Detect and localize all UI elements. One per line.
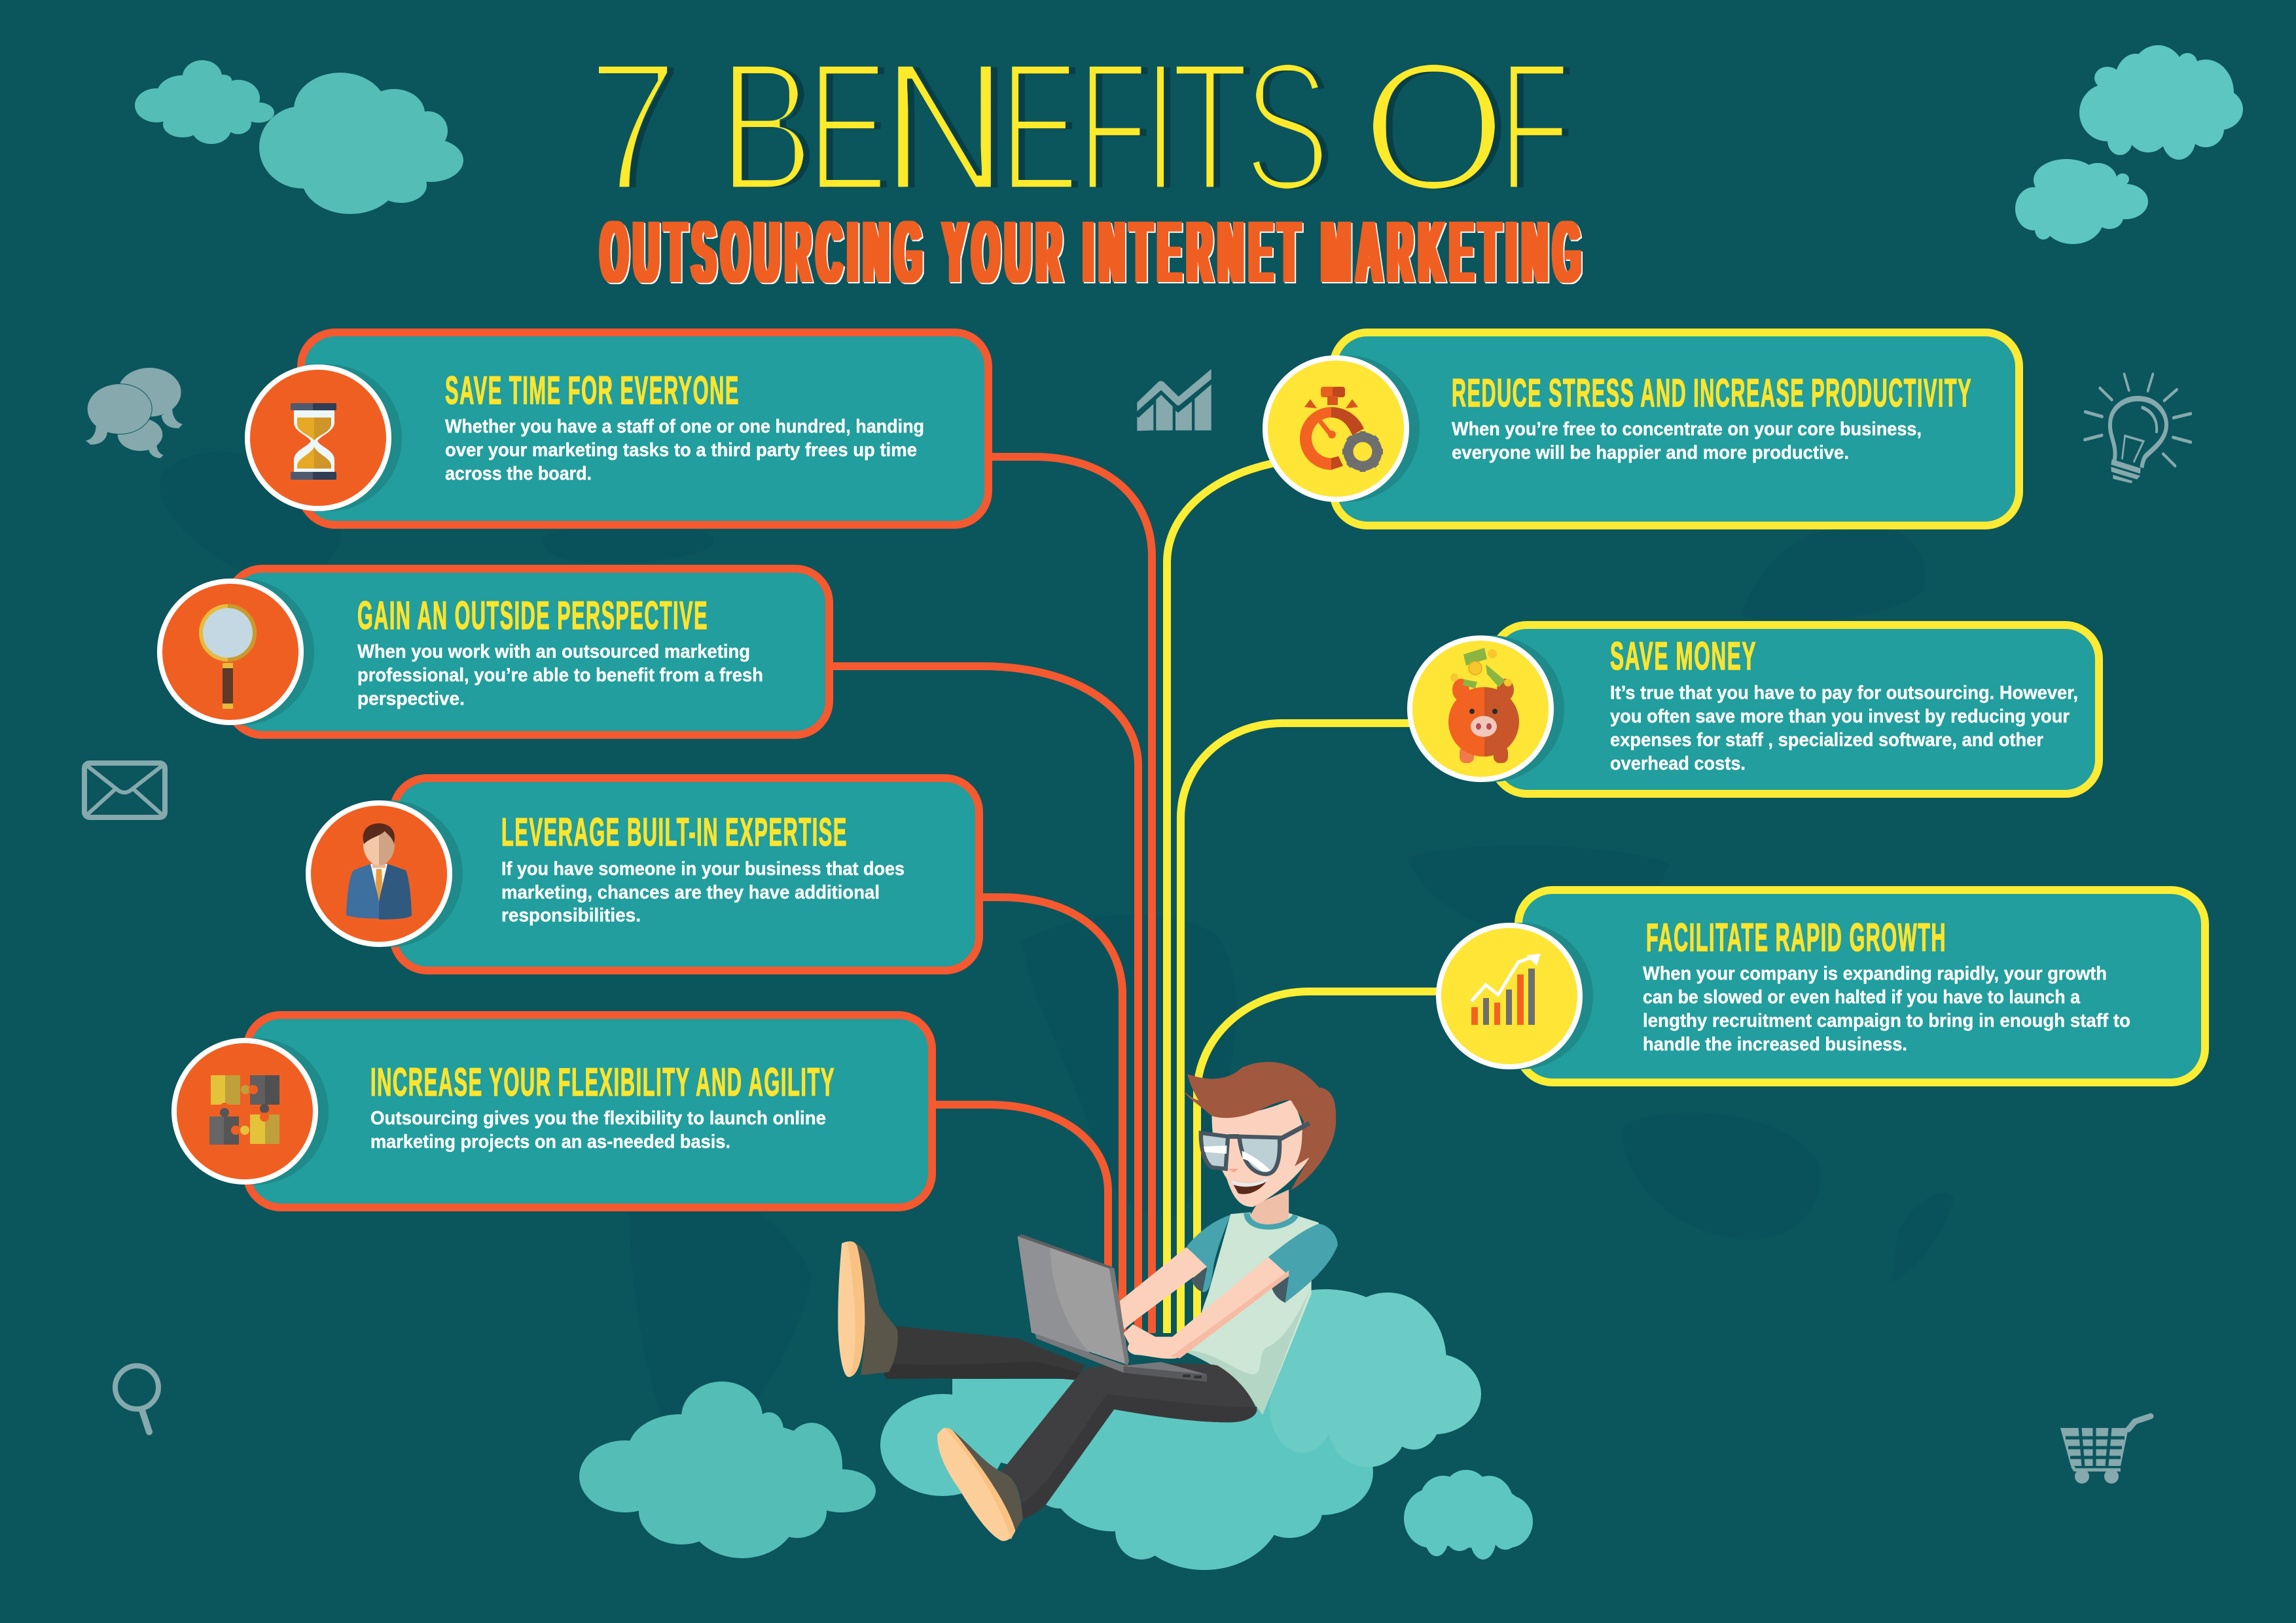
title: 7 benefits of: 7 xyxy=(588,23,677,230)
title: 7 benefits of: S xyxy=(1244,23,1330,230)
body text xyxy=(501,859,905,926)
title: 7 benefits of: O xyxy=(1362,23,1506,230)
body text xyxy=(1643,963,2130,1055)
laptop xyxy=(1018,1234,1207,1382)
icon: stopwatch and gear xyxy=(1265,355,1420,502)
body text: Outsourcing gives you the flexibility to launch online xyxy=(370,1108,826,1129)
icon: growth chart xyxy=(1439,923,1593,1069)
body text: When your company is expanding rapidly, your growth xyxy=(1643,963,2107,984)
title: 7 benefits of: T xyxy=(1172,23,1249,230)
body text: overhead costs. xyxy=(1610,753,1746,774)
cloud: top left small xyxy=(135,60,274,144)
heading: INCREASE YOUR FLEXIBILITY AND AGILITY xyxy=(370,1060,835,1104)
cloud: bottom left xyxy=(579,1382,876,1558)
heading: FACILITATE RAPID GROWTH xyxy=(1646,916,1946,959)
body text: Whether you have a staff of one or one hundred, handing xyxy=(445,416,924,437)
cloud: top left large xyxy=(259,73,463,214)
icon: shopping cart xyxy=(2060,1416,2151,1484)
body text: marketing projects on an as-needed basis. xyxy=(370,1132,730,1152)
icon: magnifying glass outline xyxy=(115,1366,158,1432)
title: 7 benefits of: E xyxy=(808,23,888,230)
body text: lengthy recruitment campaign to bring in enough staff to xyxy=(1643,1010,2130,1031)
icon: mail envelope xyxy=(84,763,165,817)
cloud: bottom right small xyxy=(1404,1470,1533,1560)
icon: hourglass xyxy=(247,365,402,511)
shirt xyxy=(1183,1212,1319,1415)
body text: you often save more than you invest by reducing your xyxy=(1610,706,2070,727)
body text: handle the increased business. xyxy=(1643,1034,1907,1055)
sleeves and arms xyxy=(1120,1215,1338,1330)
panel: reduce stress and increase productivity xyxy=(1265,332,2019,526)
panel: facilitate rapid growth xyxy=(1439,890,2205,1082)
front leg and shoe xyxy=(937,1364,1257,1541)
title: 7 benefits of: E xyxy=(1000,23,1079,230)
body text xyxy=(1452,419,1922,463)
panel: gain an outside perspective xyxy=(160,569,829,735)
body text: everyone will be happier and more productive. xyxy=(1452,442,1849,463)
front arm and hands xyxy=(1124,1257,1289,1359)
body text: When you work with an outsourced marketing xyxy=(357,641,750,662)
cloud: top right small xyxy=(2015,159,2148,244)
title: 7 benefits of: B xyxy=(719,23,813,230)
cloud: top right large xyxy=(2079,45,2243,160)
title: 7 benefits of: F xyxy=(1499,23,1570,230)
panel: leverage built-in expertise xyxy=(308,778,979,971)
title: 7 benefits of: I xyxy=(1144,23,1177,230)
icon: piggy bank with money xyxy=(1410,635,1564,782)
body text: marketing, chances are they have additional xyxy=(501,882,880,903)
icon: line and bar chart xyxy=(1137,369,1211,431)
icon: speech bubbles xyxy=(86,368,183,458)
body text: professional, you’re able to benefit from a fresh xyxy=(357,665,763,686)
heading: LEVERAGE BUILT-IN EXPERTISE xyxy=(501,810,848,854)
icon: businessman xyxy=(308,800,463,947)
body text xyxy=(370,1108,826,1152)
body text xyxy=(1610,683,2078,774)
body text: over your marketing tasks to a third party frees up time xyxy=(445,440,917,461)
icon: magnifying glass xyxy=(160,579,314,725)
title: 7 benefits of: F xyxy=(1078,23,1148,230)
head xyxy=(1183,1062,1336,1224)
cloud: under character xyxy=(880,1378,1373,1570)
body text: across the board. xyxy=(445,463,592,484)
heading: SAVE TIME FOR EVERYONE xyxy=(445,368,740,412)
body text: expenses for staff , specialized software, and other xyxy=(1610,730,2043,751)
body text: perspective. xyxy=(357,688,465,709)
body text: When you’re free to concentrate on your core business, xyxy=(1452,419,1922,440)
connector lines: orange left xyxy=(830,457,1152,1333)
cloud: lighter right of character xyxy=(1244,1289,1481,1467)
body text xyxy=(357,641,763,709)
panel: save time for everyone xyxy=(247,332,988,525)
panel: save money xyxy=(1410,625,2099,794)
body text: If you have someone in your business that does xyxy=(501,859,905,880)
body text: can be slowed or even halted if you have to launch a xyxy=(1643,987,2081,1008)
back leg and shoe xyxy=(838,1241,1086,1380)
connector lines: yellow right xyxy=(1167,458,1479,1333)
title: 7 benefits of: N xyxy=(882,23,1007,230)
icon: light bulb xyxy=(2085,374,2191,484)
body text: responsibilities. xyxy=(501,905,641,926)
body text xyxy=(445,416,924,484)
body text: It’s true that you have to pay for outsourcing. However, xyxy=(1610,683,2078,704)
icon: puzzle pieces xyxy=(174,1038,329,1185)
heading: SAVE MONEY xyxy=(1610,634,1757,678)
panel: increase your flexibility and agility xyxy=(174,1015,932,1207)
heading: GAIN AN OUTSIDE PERSPECTIVE xyxy=(357,594,708,637)
background world map xyxy=(160,452,1954,1466)
character: man with laptop on cloud xyxy=(838,1062,1338,1541)
